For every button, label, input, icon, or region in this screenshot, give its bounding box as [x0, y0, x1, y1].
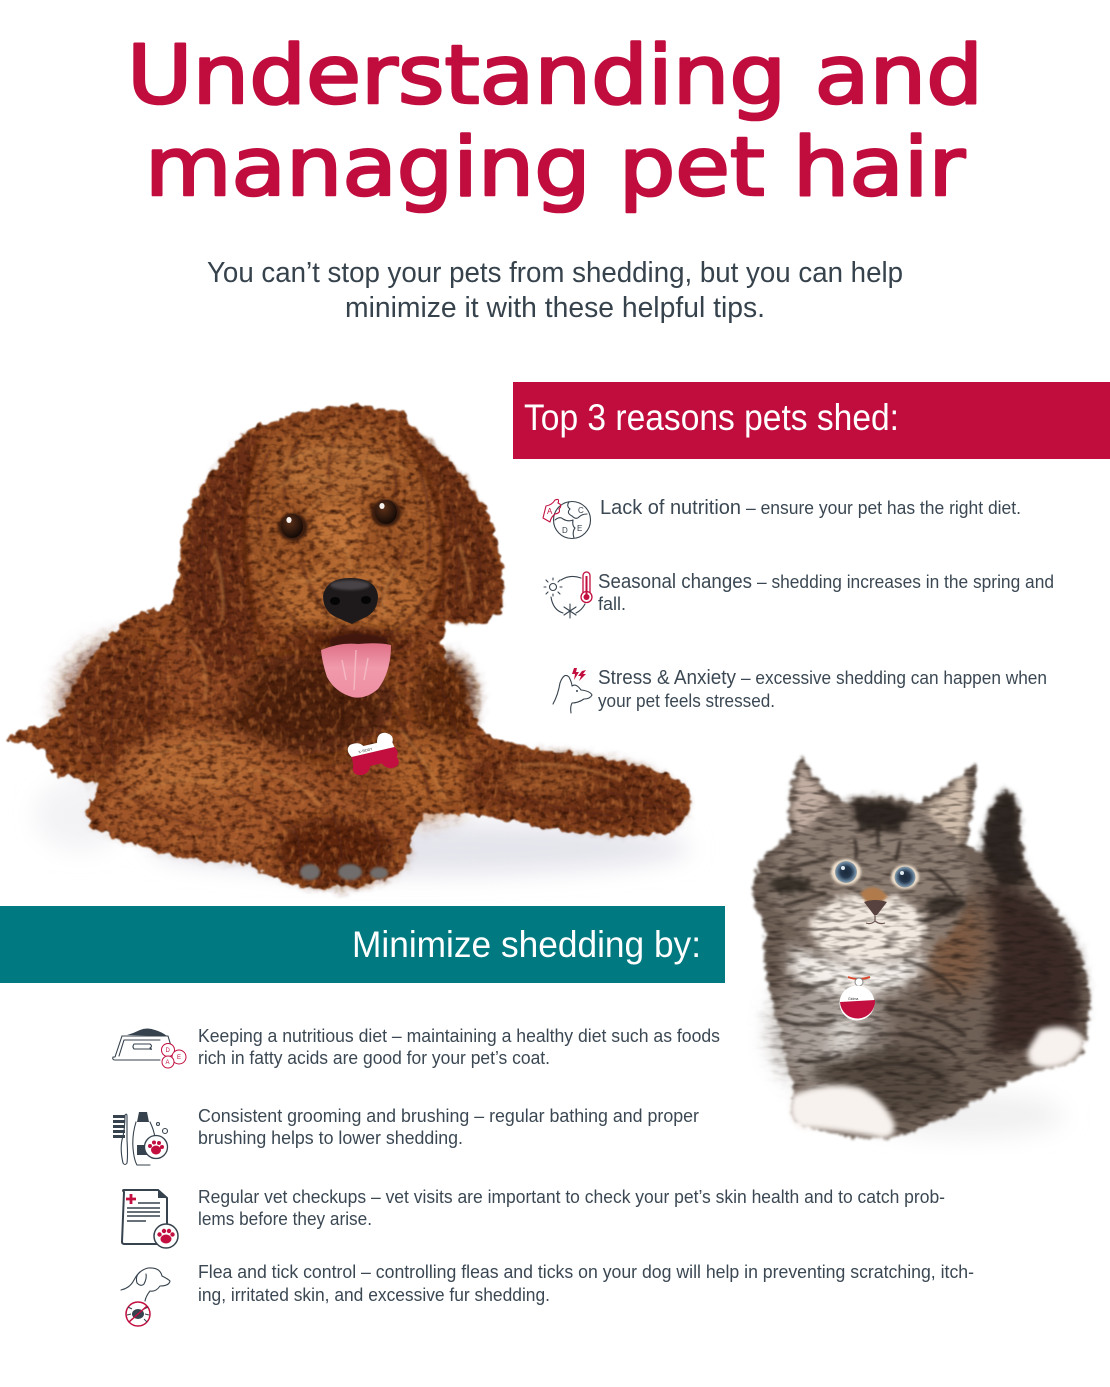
dog toe pads — [300, 864, 388, 880]
icon: seasons thermometer — [544, 572, 592, 618]
text: grooming — [198, 1106, 699, 1148]
text: grooming: Consistent grooming and brushing – regular bathing and proper — [198, 1106, 699, 1126]
kitten head — [765, 797, 969, 958]
icon: food bowl with vitamins: A — [166, 1060, 170, 1066]
dog tongue — [321, 633, 391, 698]
icon: vitamin puzzle: E — [577, 524, 582, 533]
tip: grooming — [113, 1106, 699, 1165]
text: flea and tick control: ing, irritated skin, and excessive fur shedding. — [198, 1285, 550, 1305]
text: stress and anxiety — [598, 667, 1047, 711]
header band: Minimize shedding by: Minimize shedding by: — [352, 924, 701, 965]
header band: Minimize shedding by — [0, 906, 725, 983]
subtitle: minimize it with these helpful tips. — [345, 292, 765, 324]
dog bone tag — [346, 731, 401, 777]
header band: Top 3 reasons pets shed: Top 3 reasons pets shed: — [524, 397, 899, 438]
illustration: dog photo — [7, 406, 690, 888]
dog nose — [323, 578, 378, 624]
kitten nose — [860, 887, 888, 924]
header band: Top 3 reasons pets shed — [513, 382, 1110, 459]
icon: food bowl with vitamins: D — [166, 1048, 170, 1054]
reason: lack of nutrition — [543, 497, 1021, 538]
dog head — [245, 421, 445, 657]
text: seasonal changes — [598, 571, 1054, 614]
kitten floor shadow — [865, 1093, 1065, 1137]
dog front leg — [95, 725, 405, 881]
icon: dog with no-tick sign — [121, 1268, 170, 1326]
kitten round tag — [840, 977, 875, 1020]
reasons list — [543, 497, 1054, 713]
text: flea and tick control: Flea and tick control – controlling fleas and ticks on your dog will help in preventing scratching, itch- — [198, 1262, 974, 1282]
kitten tail and rear body — [982, 790, 1030, 890]
kitten muzzle — [810, 894, 926, 962]
text: flea and tick control — [198, 1262, 974, 1305]
kitten eyes — [831, 859, 919, 889]
ear creases — [244, 432, 444, 640]
kitten tabby stripes — [780, 815, 965, 1075]
dog fur strands — [111, 425, 670, 875]
title: Understanding and — [127, 29, 983, 123]
text: lack of nutrition: Lack of nutrition — [600, 497, 741, 519]
text: nutritious diet: Keeping a nutritious diet – maintaining a healthy diet such as foods — [198, 1026, 720, 1046]
dog fur — [7, 406, 690, 888]
text: stress and anxiety: your pet feels stressed. — [598, 691, 775, 711]
text: nutritious diet — [198, 1026, 720, 1068]
title: managing pet hair — [145, 121, 966, 215]
kitten chest and front — [775, 972, 885, 1088]
dog ears — [183, 432, 255, 675]
dog bone tag: K-SIDDY — [358, 747, 374, 754]
icon: brush and shampoo — [113, 1112, 168, 1165]
text: lack of nutrition: – ensure your pet has the right diet. — [746, 498, 1021, 518]
reason: stress and anxiety — [553, 667, 1047, 713]
text: seasonal changes: fall. — [598, 594, 626, 614]
dark strands — [111, 425, 670, 875]
kitten ears — [792, 765, 838, 850]
icon: vitamin puzzle: D — [562, 526, 568, 535]
icon: food bowl with vitamins: E — [177, 1055, 181, 1061]
text: grooming: brushing helps to lower shedding. — [198, 1128, 463, 1148]
icon: anxious dog — [553, 668, 592, 713]
reason: seasonal changes — [544, 571, 1054, 618]
subtitle: You can’t stop your pets from shedding, but you can help — [207, 257, 903, 289]
icon: vitamin puzzle — [543, 499, 590, 538]
kitten round tag: Gidma — [848, 997, 858, 1001]
tip: nutritious diet — [113, 1026, 720, 1068]
illustration: kitten photo — [754, 756, 1090, 1138]
light strands — [125, 449, 620, 805]
text: seasonal changes: Seasonal changes — [598, 571, 752, 593]
subtitle — [207, 257, 903, 324]
kitten fur — [754, 756, 1090, 1138]
text: vet checkups — [198, 1187, 945, 1229]
title — [127, 29, 983, 215]
dog eyes — [278, 499, 401, 541]
text: stress and anxiety: Stress & Anxiety — [598, 667, 736, 689]
tips list — [113, 1026, 974, 1326]
tip: flea and tick control — [121, 1262, 974, 1326]
text: stress and anxiety: – excessive shedding can happen when — [741, 668, 1047, 688]
dog haunch shading — [65, 645, 175, 775]
icon: medical record — [122, 1190, 178, 1248]
kitten white paws — [790, 1027, 1085, 1138]
text: vet checkups: lems before they arise. — [198, 1209, 372, 1229]
text: nutritious diet: rich in fatty acids are good for your pet’s coat. — [198, 1048, 550, 1068]
icon: vitamin puzzle: A — [547, 507, 553, 516]
text: seasonal changes: – shedding increases in the spring and — [757, 572, 1054, 592]
dog floor shadow — [35, 779, 690, 874]
tip: vet checkups — [122, 1187, 945, 1248]
text: vet checkups: Regular vet checkups – vet visits are important to check your pet’s skin health and to catch prob- — [198, 1187, 945, 1207]
icon: food bowl with vitamins — [113, 1028, 186, 1068]
dog chest light fur — [160, 620, 250, 720]
text: lack of nutrition — [600, 497, 1021, 519]
icon: vitamin puzzle: C — [578, 506, 584, 515]
dog right leg — [470, 757, 683, 828]
